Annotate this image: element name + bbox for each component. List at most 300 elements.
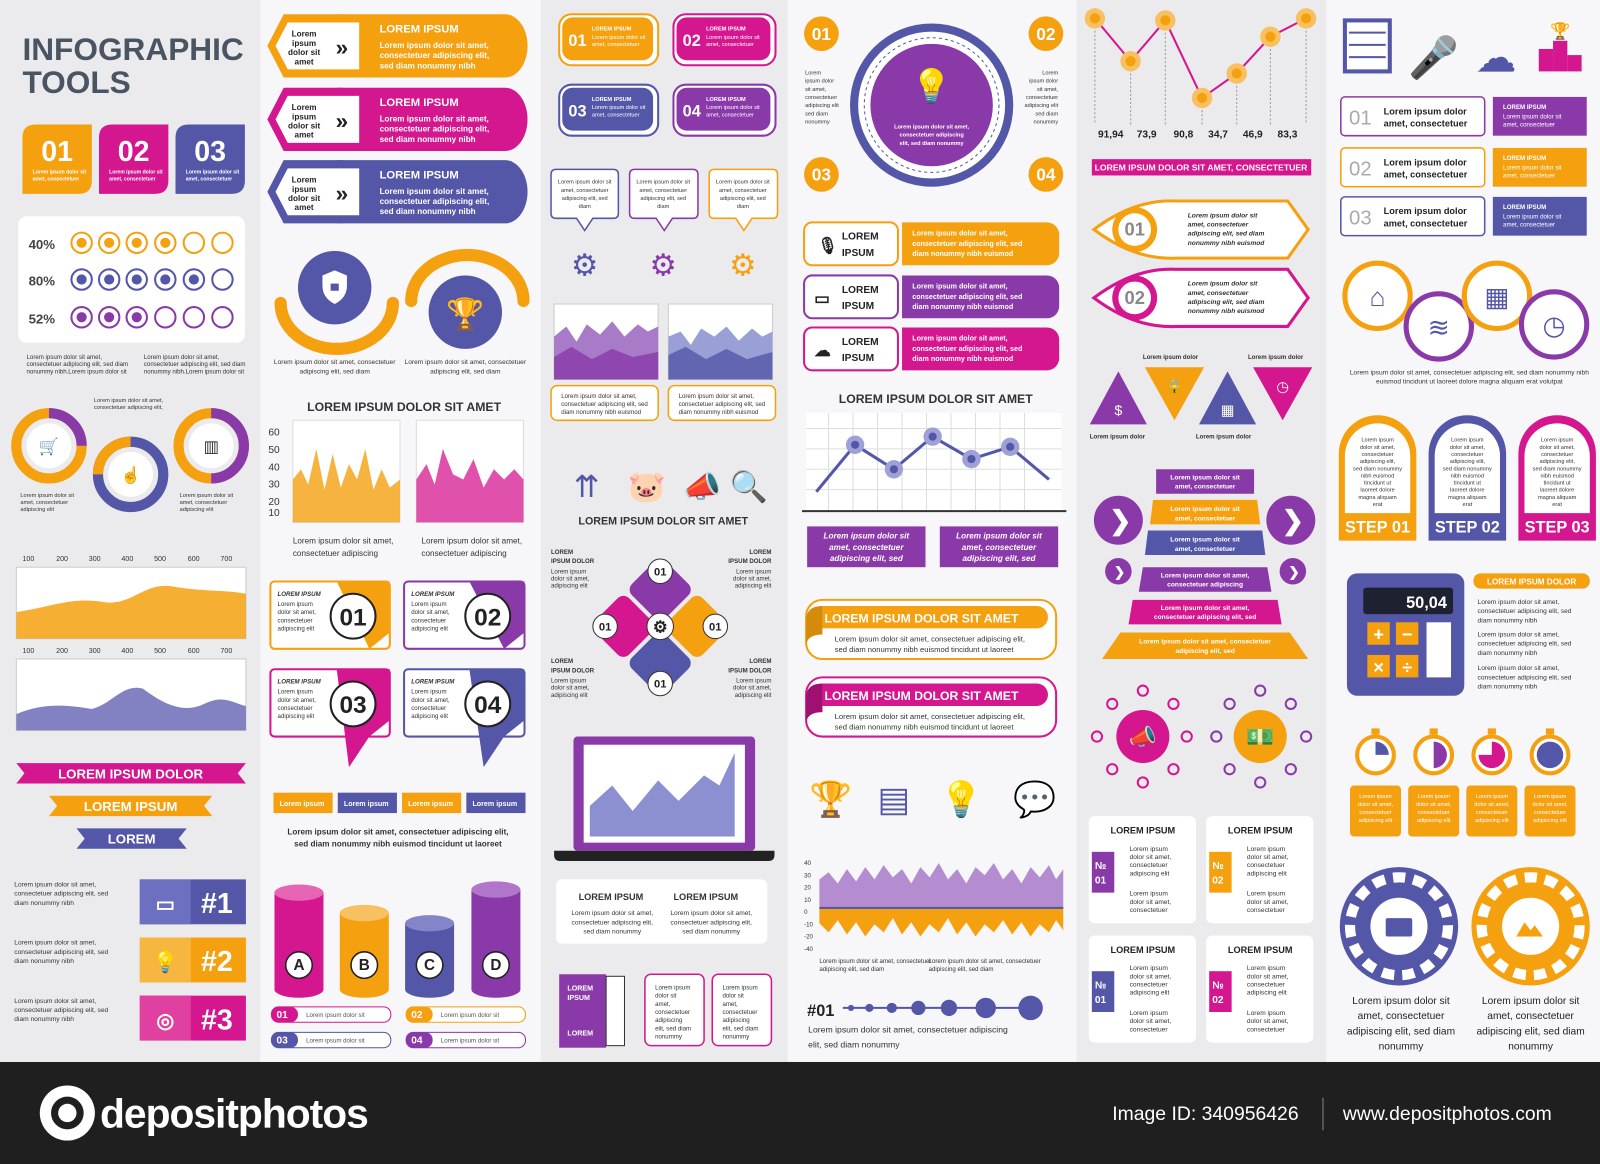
steps arches: laoreet dolore [1540, 488, 1574, 494]
calculator text: diam nonummy nibh [1478, 617, 1538, 624]
col6 numbered rows: amet, consectetuer [1503, 221, 1555, 228]
triangles row: Lorem ipsum dolor [1090, 434, 1146, 441]
col3 area charts [551, 304, 776, 420]
purple text boxes [807, 526, 1058, 567]
callouts with gears: amet, consectetuer [719, 188, 767, 194]
col4 central circle with corner numbers: nonummy [805, 119, 830, 125]
col4 list rows: LOREM [842, 232, 879, 243]
book and boxes: amet, [722, 1001, 738, 1008]
wave chart: -20 [804, 934, 814, 941]
book and boxes: adipiscing [722, 1017, 750, 1024]
icons row col3: 🐷 [628, 470, 666, 504]
col6 numbered rows: Lorem ipsum dolor sit [1503, 213, 1562, 220]
rating card: 80% [29, 274, 55, 289]
numbered boxes 01-03: Lorem ipsum dolor sit [109, 169, 163, 175]
wave chart: Lorem ipsum dolor sit amet, consectetuer [929, 958, 1041, 965]
numbered ribbons 01-04: Lorem ipsum [278, 689, 313, 696]
cylinders: A [293, 957, 305, 974]
calculator text: consectetuer adipiscing elit, sed [1478, 674, 1572, 681]
icons row col4: 🏆 [809, 779, 852, 819]
magenta banner: LOREM IPSUM DOLOR SIT AMET [824, 689, 1019, 703]
stopwatches: consectetuer [1476, 810, 1508, 816]
gears: adipiscing elit, sed diam [1347, 1026, 1455, 1037]
icons row col3 [574, 467, 768, 504]
col6 circle icons: euismod tincidunt ut laoreet dolore magna aliquam erat volutpat [1376, 379, 1563, 386]
col2 arrow banners: » [336, 109, 348, 134]
steps arches: STEP 02 [1435, 519, 1500, 537]
book and boxes: IPSUM [567, 994, 590, 1002]
tag row [273, 793, 526, 813]
numbered boxes 01-03: 02 [118, 136, 150, 168]
ranking rows #1-#3: Lorem ipsum dolor sit amet, [14, 882, 96, 889]
steps arches: erat [1373, 502, 1383, 508]
pyramid with arrows: adipiscing elit, sed [1175, 648, 1235, 655]
calculator: − [1402, 624, 1413, 645]
donut icons: ☝ [120, 464, 141, 485]
col4 central circle with corner numbers: sit amet, [1037, 87, 1059, 93]
col2 arrow banners: amet [295, 131, 314, 140]
diamond diagram: ⚙ [653, 618, 668, 636]
col2 arrow banners: Lorem [292, 176, 317, 185]
steps arches: sed diam nonummy [1353, 466, 1402, 472]
col3 area charts: diam nonummy nibh euismod [679, 409, 758, 416]
col3 pills 01-04: 02 [683, 32, 701, 50]
area chart orange: 200 [56, 555, 68, 563]
ranking rows #1-#3: diam nonummy nibh [14, 1016, 74, 1023]
triangles row: Lorem ipsum dolor [1196, 434, 1252, 441]
numbered ribbons 01-04: Lorem ipsum [411, 689, 447, 696]
calculator text: LOREM IPSUM DOLOR [1487, 578, 1576, 587]
area chart orange: 100 [22, 647, 34, 655]
text col2 [287, 827, 509, 849]
donut icons: Lorem ipsum dolor sit [180, 493, 234, 499]
numbered boxes 01-03: 01 [41, 136, 73, 168]
numbered boxes 01-03: Lorem ipsum dolor sit [33, 169, 86, 175]
numbered ribbons 01-04: adipiscing elit [278, 625, 315, 632]
steps arches: Lorem ipsum [1451, 438, 1484, 444]
diamond diagram [551, 549, 772, 699]
col4 central circle with corner numbers: adipiscing elit [805, 103, 839, 109]
calculator: ÷ [1402, 656, 1412, 677]
col5 top line chart: 91,94 [1098, 130, 1124, 141]
text card col3: sed diam nonummy [682, 928, 741, 935]
callouts with gears: adipiscing elit, sed [720, 196, 766, 202]
steps arches: nibh euismod [1361, 473, 1394, 479]
steps arches: consectetuer [1541, 452, 1573, 458]
area charts col2: 10 [268, 508, 280, 519]
steps arches: erat [1463, 502, 1473, 508]
steps arches: STEP 03 [1525, 519, 1590, 537]
caption text col1: nonummy nibh.Lorem ipsum dolor sit [27, 368, 127, 375]
col2 arrow banners: » [336, 181, 348, 206]
col6 numbered rows [1341, 97, 1587, 236]
area chart orange: 600 [188, 647, 200, 655]
numbered ribbons 01-04: consectetuer [411, 705, 446, 712]
Nº cards: Lorem ipsum [1247, 965, 1286, 972]
Nº cards: 01 [1095, 875, 1107, 886]
diamond diagram: dolor sit amet, [733, 685, 772, 692]
col2 arrow banners: LOREM IPSUM [380, 97, 459, 109]
ranking rows #1-#3: Lorem ipsum dolor sit amet, [14, 940, 96, 947]
Nº cards: Lorem ipsum [1130, 891, 1168, 898]
ranking rows #1-#3: consectetuer adipiscing elit, sed [14, 949, 109, 956]
col4 central circle with corner numbers: adipiscing elit [1024, 103, 1059, 109]
purple text boxes: amet, consectetuer [962, 543, 1037, 552]
numbered ribbons 01-04: dolor sit amet, [278, 697, 316, 704]
steps arches: laoreet dolore [1360, 488, 1395, 494]
purple text boxes: Lorem ipsum dolor sit [956, 532, 1042, 541]
numbered ribbons 01-04: LOREM IPSUM [278, 591, 322, 598]
stopwatches: Lorem ipsum [1359, 794, 1392, 800]
title: TOOLS [22, 64, 131, 100]
Nº cards: 01 [1095, 995, 1107, 1006]
pyramid with arrows: Lorem ipsum dolor sit [1170, 537, 1241, 544]
title [22, 31, 244, 100]
col2 arrow banners: » [336, 35, 348, 60]
col4 central circle with corner numbers: consectetuer [805, 95, 837, 101]
col2 arrow banners: sed diam nonummy nibh [380, 135, 476, 144]
col6 top icons: 🏆 [1550, 22, 1570, 41]
col4 central circle with corner numbers: consectetuer [1026, 95, 1058, 101]
eye arrows 01 02: amet, consectetuer [1188, 221, 1249, 228]
Nº cards: 02 [1212, 995, 1224, 1006]
area chart orange: 700 [220, 647, 232, 655]
diamond diagram: 01 [599, 621, 611, 633]
diamond diagram: dolor sit amet, [551, 575, 590, 582]
area charts col2: 40 [268, 462, 280, 473]
col6 circle icons: ◷ [1543, 311, 1566, 341]
icons row col4 [809, 779, 1056, 819]
col2 arrow banners: consectetuer adipiscing elit, [380, 197, 489, 206]
col5 top line chart: 34,7 [1208, 130, 1228, 141]
col4 list rows: Lorem ipsum dolor sit amet, [912, 335, 1008, 343]
col4 list rows: consectetuer adipiscing elit, sed [912, 240, 1022, 248]
col6 numbered rows: Lorem ipsum dolor [1384, 106, 1467, 116]
text card col3: consectetuer adipiscing elit, [572, 919, 653, 926]
book and boxes: dolor sit [655, 993, 677, 1000]
footer bar: www.depositphotos.com [1342, 1103, 1552, 1125]
col4 central circle with corner numbers: 💡 [911, 67, 952, 105]
diamond diagram: LOREM [749, 658, 771, 665]
caption text col1: Lorem ipsum dolor sit amet, [144, 354, 220, 361]
book and boxes: adipiscing [655, 1017, 682, 1024]
numbered ribbons 01-04: dolor sit amet, [411, 697, 450, 704]
numbered ribbons 01-04: adipiscing elit [411, 713, 448, 720]
numbered boxes 01-03: amet, consectetuer [33, 177, 79, 183]
area charts col2: Lorem ipsum dolor sit amet, [421, 537, 522, 546]
text col2: sed diam nonummy nibh euismod tincidunt ut laoreet [294, 840, 502, 849]
col6 numbered rows: 03 [1349, 207, 1372, 229]
pyramid with arrows: ❯ [1109, 505, 1132, 536]
ranking rows #1-#3: consectetuer adipiscing elit, sed [14, 891, 109, 898]
col3 area charts: Lorem ipsum dolor sit amet, [561, 393, 637, 400]
col6 numbered rows: amet, consectetuer [1384, 170, 1468, 180]
area chart orange: 200 [56, 647, 68, 655]
col2 arrow banners: ipsum [292, 112, 316, 121]
area chart orange [16, 555, 246, 730]
col6 numbered rows: Lorem ipsum dolor sit [1503, 164, 1562, 171]
col3 pills 01-04: 01 [568, 32, 587, 50]
callouts with gears: diam [737, 204, 749, 210]
orange banner [806, 600, 1056, 659]
diamond diagram: Lorem ipsum [736, 568, 771, 575]
heading col3: LOREM IPSUM DOLOR SIT AMET [578, 515, 749, 527]
col6 circle icons: Lorem ipsum dolor sit amet, consectetuer adipiscing elit, sed diam nonummy nibh [1350, 369, 1589, 376]
text card col3: Lorem ipsum dolor sit amet, [571, 910, 653, 917]
numbered ribbons 01-04: consectetuer [278, 617, 313, 624]
col2 arrow banners: dolor sit [288, 194, 320, 203]
numbered ribbons 01-04: 01 [339, 604, 367, 631]
ranking rows #1-#3: #2 [201, 946, 233, 978]
diamond diagram: adipiscing elit [735, 692, 772, 699]
radial icons: 📣 [1129, 725, 1157, 750]
magenta banner: sed diam nonummy nibh euismod tincidunt ut laoreet [835, 722, 1014, 731]
steps arches: consectetuer [1451, 452, 1484, 458]
caption text col1: consectetuer adipiscing elit, sed diam [144, 361, 245, 368]
numbered ribbons 01-04: Lorem ipsum [278, 601, 313, 608]
steps arches: tincidunt ut [1544, 481, 1571, 487]
shield and trophy icons: adipiscing elit, sed diam [430, 368, 501, 375]
col3 pills 01-04: LOREM IPSUM [706, 27, 746, 33]
Nº cards: Lorem ipsum [1247, 846, 1286, 853]
book and boxes: nonummy [722, 1034, 750, 1041]
ranking rows #1-#3: diam nonummy nibh [14, 958, 74, 965]
stopwatches: adipiscing elit [1359, 818, 1393, 824]
donut icons: amet, consectetuer [20, 500, 68, 506]
callouts with gears: adipiscing elit, sed [562, 196, 608, 202]
donut icons: amet, consectetuer [180, 500, 227, 506]
area chart orange: 300 [89, 647, 101, 655]
wave chart: 40 [804, 860, 811, 867]
caption text col1: consectetuer adipiscing elit, sed diam [27, 361, 128, 368]
ranking rows #1-#3: Lorem ipsum dolor sit amet, [14, 998, 96, 1005]
col2 arrow banners: dolor sit [288, 122, 320, 131]
col2 arrow banners: amet [295, 203, 314, 212]
pill list 01-04: 02 [411, 1010, 423, 1021]
numbered ribbons 01-04: dolor sit amet, [278, 609, 316, 616]
col4 list rows: IPSUM [842, 248, 874, 259]
wave chart: Lorem ipsum dolor sit amet, consectetuer [819, 958, 931, 965]
timeline #01 [807, 996, 1043, 1050]
pill list 01-04: 04 [411, 1036, 423, 1047]
pyramid with arrows: consectetuer adipiscing [1167, 582, 1243, 589]
callouts with gears: diam [579, 204, 591, 210]
book and boxes: consectetuer [722, 1009, 757, 1016]
steps arches: adipiscing elit, [1540, 459, 1575, 465]
Nº cards: 02 [1212, 875, 1224, 886]
wave chart: adipiscing elit, sed diam [819, 966, 884, 973]
numbered ribbons 01-04: 03 [339, 692, 367, 719]
col4 central circle with corner numbers [804, 16, 1063, 192]
icons row col3: ⇈ [574, 470, 600, 504]
heading col2 chart: LOREM IPSUM DOLOR SIT AMET [307, 400, 502, 414]
wave chart: 10 [804, 897, 811, 904]
caption text col1: nonummy nibh.Lorem ipsum dolor sit [144, 368, 244, 375]
Nº cards: dolor sit amet, [1130, 854, 1171, 861]
steps arches: STEP 01 [1345, 519, 1410, 537]
Nº cards: № [1095, 981, 1106, 992]
area chart orange: 500 [154, 647, 166, 655]
col5 top line chart: LOREM IPSUM DOLOR SIT AMET, CONSECTETUER [1095, 162, 1308, 172]
col4 list rows [804, 222, 1059, 370]
stopwatches: Lorem ipsum [1476, 794, 1508, 800]
orange banner: sed diam nonummy nibh euismod tincidunt ut laoreet [835, 645, 1014, 654]
title: INFOGRAPHIC [22, 31, 244, 67]
book and boxes [559, 974, 771, 1048]
col3 area charts: diam nonummy nibh euismod [561, 409, 641, 416]
Nº cards: adipiscing elit [1130, 870, 1170, 877]
timeline #01: elit, sed diam nonummy [808, 1040, 900, 1050]
numbered ribbons 01-04: consectetuer [278, 705, 313, 712]
diamond diagram: Lorem ipsum [551, 677, 586, 684]
stopwatches [1350, 728, 1576, 837]
col6 numbered rows: 02 [1349, 158, 1372, 180]
timeline #01: #01 [807, 1002, 834, 1020]
calculator text: diam nonummy nibh [1478, 650, 1538, 657]
gears: amet, consectetuer [1358, 1011, 1445, 1022]
gears: nonummy [1508, 1042, 1554, 1053]
col5 top line chart: 46,9 [1243, 130, 1263, 141]
callouts with gears: Lorem ipsum dolor sit [636, 180, 691, 186]
ranking rows #1-#3: 💡 [153, 950, 178, 974]
col4 list rows: diam nonummy nibh euismod [912, 250, 1013, 258]
purple text boxes: Lorem ipsum dolor sit [823, 532, 909, 541]
col3 pills 01-04: Lorem ipsum dolor sit [592, 105, 646, 111]
steps arches: magna aliquam [1538, 495, 1577, 501]
purple text boxes: adipiscing elit, sed [830, 554, 904, 563]
numbered ribbons 01-04: dolor sit amet, [411, 609, 450, 616]
donut icons [16, 398, 244, 513]
stopwatches: adipiscing elit [1417, 818, 1451, 824]
col2 arrow banners: Lorem ipsum dolor sit amet, [380, 114, 489, 123]
heading col4 line chart: LOREM IPSUM DOLOR SIT AMET [839, 392, 1033, 406]
donut icons: 🛒 [39, 437, 59, 456]
col6 top icons [1345, 20, 1582, 80]
shield and trophy icons [274, 251, 527, 375]
area chart orange: 400 [121, 555, 133, 563]
stopwatches: Lorem ipsum [1417, 794, 1450, 800]
area chart orange: 300 [89, 555, 101, 563]
col3 pills 01-04: 03 [568, 102, 587, 120]
purple text boxes: adipiscing elit, sed [962, 554, 1036, 563]
callouts with gears: ⚙ [571, 248, 598, 282]
col6 numbered rows: Lorem ipsum dolor sit [1503, 113, 1562, 120]
Nº cards: № [1212, 981, 1224, 992]
col4 list rows: 🎙 [817, 236, 838, 255]
callouts with gears: diam [657, 204, 670, 210]
cylinders: C [424, 957, 435, 974]
col2 arrow banners: amet [295, 57, 314, 66]
text card col3: sed diam nonummy [583, 928, 642, 935]
col4 central circle with corner numbers: Lorem [1042, 70, 1058, 76]
callouts with gears [551, 169, 778, 282]
col2 arrow banners: Lorem [292, 30, 317, 39]
pyramid with arrows: amet, consectetuer [1175, 515, 1236, 522]
purple text boxes: amet, consectetuer [829, 543, 904, 552]
diamond diagram: adipiscing elit [551, 692, 588, 699]
donut icons: adipiscing elit [180, 507, 214, 513]
col4 central circle with corner numbers: ipsum dolor [805, 79, 834, 85]
col6 numbered rows: amet, consectetuer [1503, 122, 1555, 128]
steps arches: consectetuer [1361, 452, 1394, 458]
donut icons: Lorem ipsum dolor sit amet, [94, 398, 164, 404]
pyramid with arrows: ❯ [1282, 505, 1304, 536]
calculator: + [1373, 624, 1384, 645]
steps arches: adipiscing elit, [1360, 459, 1396, 465]
numbered ribbons 01-04: adipiscing elit [278, 713, 315, 720]
col3 pills 01-04 [559, 14, 776, 136]
wave chart: -10 [804, 921, 814, 928]
pill list 01-04: Lorem ipsum dolor sit [306, 1012, 365, 1019]
col6 numbered rows: Lorem ipsum dolor [1384, 157, 1467, 167]
wave chart: adipiscing elit, sed diam [929, 966, 993, 973]
callouts with gears: ⚙ [650, 248, 677, 282]
radial icons [1092, 686, 1311, 788]
Nº cards: dolor sit amet, [1130, 973, 1171, 980]
icons row col3: 📣 [683, 470, 721, 504]
col4 central circle with corner numbers: 01 [812, 24, 831, 44]
col6 numbered rows: LOREM IPSUM [1503, 104, 1546, 111]
col3 area charts: Lorem ipsum dolor sit amet, [679, 393, 754, 400]
icons row col4: 💡 [940, 779, 983, 819]
magenta banner [806, 677, 1056, 737]
diamond diagram: dolor sit amet, [551, 685, 590, 692]
wave chart [804, 860, 1063, 973]
area charts col2: 20 [268, 497, 280, 508]
Nº cards: LOREM IPSUM [1110, 945, 1176, 955]
col3 pills 01-04: Lorem ipsum dolor sit [592, 35, 646, 41]
ribbons: LOREM IPSUM DOLOR [58, 766, 204, 781]
col4 list rows: consectetuer adipiscing elit, sed [912, 345, 1022, 353]
wave chart: -40 [804, 946, 814, 953]
Nº cards: Lorem ipsum [1130, 846, 1168, 853]
col4 central circle with corner numbers: sit amet, [805, 87, 827, 93]
radial icons: 💵 [1246, 725, 1274, 750]
eye arrows 01 02: adipiscing elit, sed diam [1188, 231, 1264, 238]
numbered boxes 01-03 [22, 124, 245, 194]
area chart orange: 500 [154, 555, 166, 563]
col3 pills 01-04: Lorem ipsum dolor sit [706, 105, 760, 111]
shield and trophy icons: Lorem ipsum dolor sit amet, consectetuer [405, 359, 527, 366]
steps arches: sed diam nonummy [1443, 466, 1492, 472]
pyramid with arrows: amet, consectetuer [1175, 546, 1236, 553]
steps arches: tincidunt ut [1454, 481, 1481, 487]
col3 pills 01-04: amet, consectetuer [706, 42, 754, 48]
book and boxes: amet, [655, 1001, 671, 1008]
calculator text: consectetuer adipiscing elit, sed [1478, 608, 1572, 615]
col6 numbered rows: amet, consectetuer [1503, 173, 1555, 180]
numbered boxes 01-03: 03 [194, 136, 226, 168]
numbered boxes 01-03: amet, consectetuer [186, 177, 232, 183]
book and boxes: LOREM [567, 985, 593, 993]
area chart orange: 400 [121, 647, 133, 655]
triangles row: Lorem ipsum dolor [1248, 354, 1304, 361]
stopwatches: adipiscing elit [1533, 818, 1567, 824]
numbered ribbons 01-04: Lorem ipsum [411, 601, 447, 608]
col3 pills 01-04: amet, consectetuer [592, 112, 640, 118]
col5 top line chart: 90,8 [1173, 130, 1194, 141]
col4 central circle with corner numbers: nonummy [1034, 119, 1058, 125]
col3 pills 01-04: Lorem ipsum dolor sit [706, 35, 760, 41]
ribbons: LOREM IPSUM [84, 799, 177, 814]
col2 arrow banners: Lorem [292, 103, 317, 112]
tag row: Lorem ipsum [408, 800, 453, 808]
col6 top icons: ☁ [1476, 34, 1516, 80]
Nº cards: adipiscing elit [1247, 870, 1287, 877]
col4 central circle with corner numbers: Lorem [805, 70, 821, 76]
rating card [18, 216, 245, 343]
text card col3 [556, 879, 767, 944]
